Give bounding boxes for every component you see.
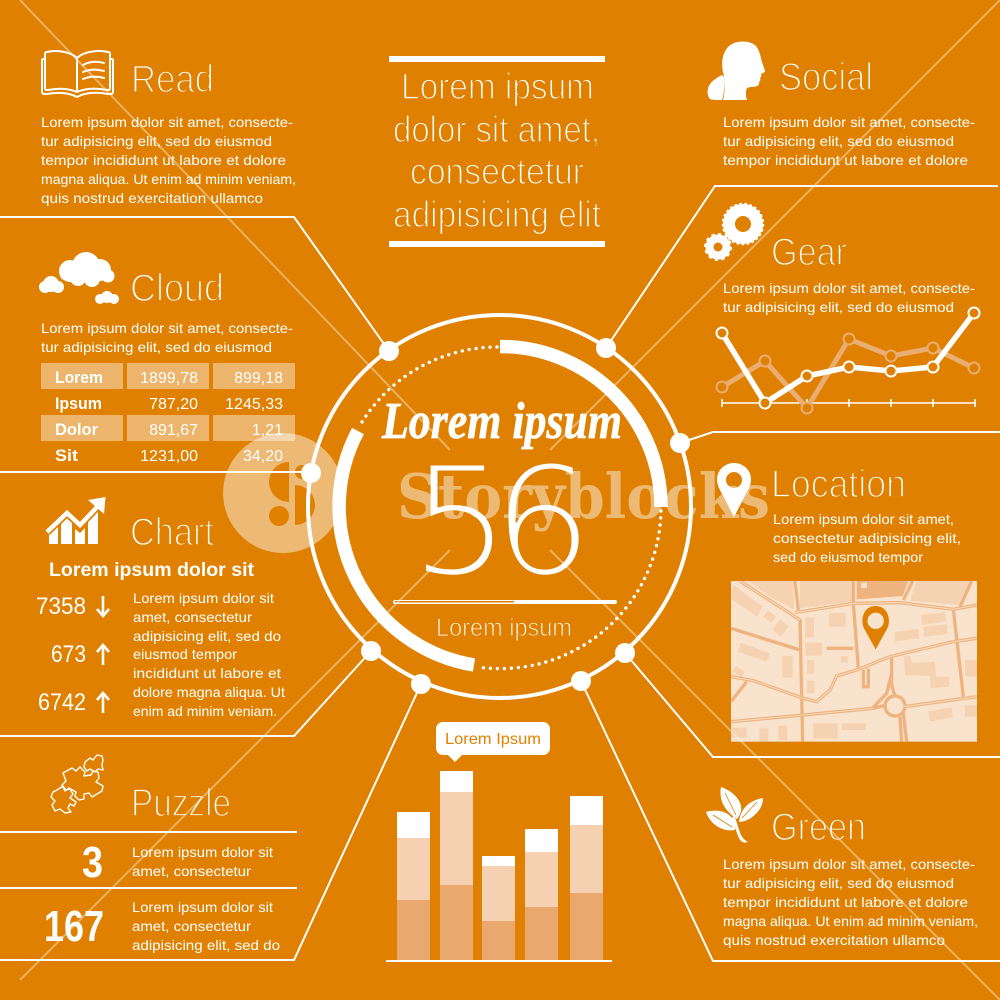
- data table: Dolor: [55, 420, 98, 439]
- text block: cloud: [41, 320, 293, 355]
- heading: puzzle: Puzzle: [131, 782, 231, 825]
- data table: 1899,78: [140, 370, 198, 387]
- stat: 3: 3: [82, 838, 103, 887]
- heading: cloud: Cloud: [130, 267, 224, 310]
- text block: puzzle 2: [132, 899, 280, 953]
- central gauge: [301, 315, 691, 698]
- text block: green: tur adipisicing elit, sed do eiusmod: [723, 875, 954, 891]
- title block: dolor sit amet,: [393, 109, 600, 150]
- panel: location: [717, 463, 977, 742]
- icon: rising chart: [47, 497, 106, 544]
- text block: chart: dolore magna aliqua. Ut: [133, 684, 285, 700]
- heading: green: Green: [771, 806, 866, 849]
- street map: [731, 581, 977, 742]
- icon: clouds: [39, 252, 119, 304]
- text block: read: tur adipisicing elit, sed do eiusmod: [41, 133, 272, 149]
- text block: puzzle 2: Lorem ipsum dolor sit: [132, 899, 273, 915]
- text block: location: consectetur adipisicing elit,: [773, 530, 961, 546]
- text block: read: quis nostrud exercitation ullamco: [41, 190, 263, 206]
- data table: 1231,00: [140, 448, 198, 465]
- text block: chart: eiusmod tempor: [133, 646, 237, 662]
- text block: social: tempor incididunt ut labore et dolore: [723, 152, 968, 168]
- progress bar: [393, 600, 617, 604]
- text block: chart: adipisicing elit, sed do: [133, 628, 281, 644]
- script heading: Lorem ipsum: [381, 393, 622, 450]
- big number: 56: [410, 435, 593, 608]
- text block: cloud: tur adipisicing elit, sed do eiusmod: [41, 339, 272, 355]
- stat: 167: 167: [44, 902, 104, 951]
- data table: 787,20: [149, 396, 198, 413]
- title block: [389, 56, 605, 247]
- text block: green: magna aliqua. Ut enim ad minim veniam,: [723, 913, 978, 929]
- data table: Lorem: [55, 368, 103, 387]
- title block: adipisicing elit: [393, 194, 602, 235]
- watermark: Storyblocks: [397, 460, 770, 533]
- text block: chart: amet, consectetur: [133, 609, 252, 625]
- text block: location: sed do eiusmod tempor: [773, 549, 923, 565]
- text block: green: tempor incididunt ut labore et dolore: [723, 894, 968, 910]
- panel: cloud: [39, 252, 295, 465]
- text block: puzzle 1: [132, 844, 273, 879]
- stacked bar chart: [386, 722, 612, 962]
- data table: [41, 363, 295, 465]
- text block: puzzle 2: adipisicing elit, sed do: [132, 937, 280, 953]
- text block: location: [773, 511, 961, 565]
- title block: consectetur: [410, 151, 584, 192]
- icon: puzzle pieces: [51, 755, 103, 813]
- text block: read: magna aliqua. Ut enim ad minim veniam,: [41, 171, 296, 187]
- panel: social: [708, 42, 975, 168]
- panel: puzzle: [44, 755, 280, 953]
- text block: gear: [723, 280, 975, 315]
- text block: social: [723, 114, 975, 168]
- data table: Ipsum: [55, 394, 102, 413]
- text block: read: Lorem ipsum dolor sit amet, consecte-: [41, 114, 293, 130]
- dotted arcs: [359, 347, 661, 669]
- heading: chart: Chart: [130, 511, 214, 554]
- data table: 899,18: [234, 370, 283, 387]
- panel: gear: [706, 204, 980, 414]
- connector nodes: [301, 338, 690, 694]
- panel: read: [41, 51, 296, 206]
- icon: open book: [42, 51, 113, 97]
- data table: 1,21: [252, 422, 283, 439]
- panel: green: [706, 787, 978, 948]
- icon: leaves: [706, 787, 763, 843]
- text block: puzzle 2: amet, consectetur: [132, 918, 251, 934]
- panel: chart: [36, 497, 285, 719]
- heading: read: Read: [131, 58, 214, 101]
- icon: location pin: [717, 463, 751, 517]
- thick arcs: [339, 346, 661, 665]
- text block: chart: Lorem ipsum dolor sit: [133, 590, 274, 606]
- data table: 1245,33: [225, 396, 283, 413]
- heading: location: Location: [771, 463, 906, 506]
- data table: 891,67: [149, 422, 198, 439]
- text block: read: tempor incididunt ut labore et dolore: [41, 152, 286, 168]
- text block: location: Lorem ipsum dolor sit amet,: [773, 511, 954, 527]
- gauge label: Lorem ipsum: [436, 614, 572, 642]
- text block: read: [41, 114, 296, 206]
- text block: chart: enim ad minim veniam.: [133, 703, 277, 719]
- line chart: [716, 308, 980, 414]
- heading: gear: Gear: [771, 231, 847, 274]
- text block: green: quis nostrud exercitation ullamco: [723, 932, 945, 948]
- stats: 673: [51, 641, 86, 668]
- text block: puzzle 1: amet, consectetur: [132, 863, 251, 879]
- text block: chart: [133, 590, 285, 719]
- title block: Lorem ipsum: [401, 66, 594, 107]
- text block: chart: incididunt ut labore et: [133, 665, 281, 681]
- text block: gear: Lorem ipsum dolor sit amet, consecte-: [723, 280, 975, 296]
- stats: 6742: [38, 689, 86, 716]
- data table: Sit: [55, 446, 78, 465]
- subheading: Lorem ipsum dolor sit: [49, 560, 255, 581]
- connector lines: [0, 186, 1000, 961]
- data table: 34,20: [243, 448, 283, 465]
- text block: puzzle 1: Lorem ipsum dolor sit: [132, 844, 273, 860]
- text block: green: [723, 856, 978, 948]
- stats: 7358: [36, 593, 86, 620]
- text block: social: Lorem ipsum dolor sit amet, consecte-: [723, 114, 975, 130]
- text block: green: Lorem ipsum dolor sit amet, consecte-: [723, 856, 975, 872]
- text block: social: tur adipisicing elit, sed do eiusmod: [723, 133, 954, 149]
- icon: woman profile: [708, 42, 765, 100]
- text block: cloud: Lorem ipsum dolor sit amet, consecte-: [41, 320, 293, 336]
- icon: gears: [706, 204, 762, 260]
- tooltip: [436, 722, 550, 762]
- stats: [36, 593, 109, 716]
- outer ring: [308, 315, 691, 698]
- text block: gear: tur adipisicing elit, sed do eiusmod: [723, 299, 954, 315]
- heading: social: Social: [779, 56, 873, 99]
- tooltip: Lorem Ipsum: [445, 731, 541, 748]
